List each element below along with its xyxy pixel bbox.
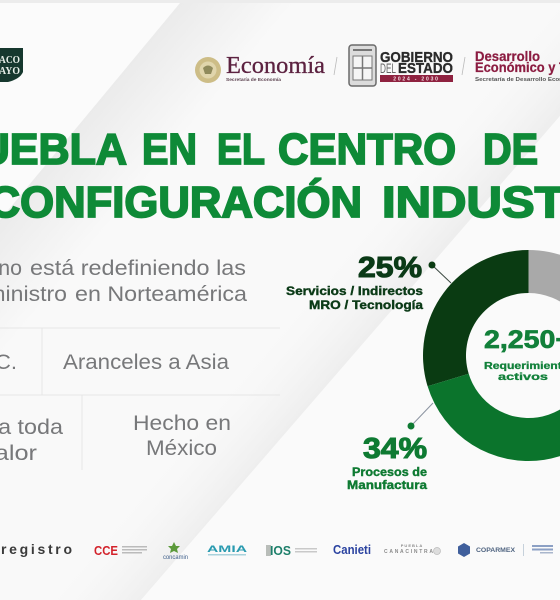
logo: Gobierno del Estado: ESTADO bbox=[398, 60, 453, 77]
logo: Desarrollo Económico y Trabajo: Desarrollo bbox=[475, 48, 540, 64]
logo: Gobierno del Estado: GOBIERNO bbox=[380, 49, 453, 66]
logo: Concamin bbox=[163, 542, 188, 561]
logo: Gobierno del Estado: 2024 - 2030 bbox=[393, 76, 440, 82]
title bbox=[0, 125, 560, 227]
callout: 34%: Manufactura bbox=[347, 478, 427, 492]
cell: Aranceles a Asia: Aranceles a Asia bbox=[63, 351, 229, 374]
title line 1: CENTRO bbox=[278, 125, 456, 174]
title line 1: DE bbox=[483, 125, 538, 174]
center value: 2,250+ bbox=[484, 326, 560, 354]
center value bbox=[484, 326, 560, 383]
title line 1: EN bbox=[142, 125, 197, 174]
logo: Gobierno del Estado bbox=[349, 45, 453, 86]
cell: Hecho en México bbox=[133, 412, 231, 460]
logo: Cinco de Mayo shield bbox=[0, 48, 23, 82]
logo: CCE: CCE bbox=[94, 543, 118, 558]
intro text: está redefiniendo las bbox=[30, 257, 246, 280]
logo: IOS: IOS bbox=[270, 543, 291, 558]
segment: dark green 25% bbox=[423, 250, 528, 386]
center value: Requerimientos bbox=[484, 361, 560, 372]
table of factors bbox=[0, 328, 280, 470]
logo: Canacintra bbox=[384, 543, 440, 555]
logo: Canacintra: PUEBLA bbox=[401, 543, 423, 548]
callout: 25%: MRO / Tecnología bbox=[309, 298, 423, 312]
cell: cadena de valor bbox=[0, 416, 63, 465]
logo: Canieti: Canieti bbox=[333, 542, 371, 557]
title line 2 bbox=[0, 177, 560, 227]
callout: 25%: Servicios / Indirectos bbox=[286, 284, 423, 298]
donut chart bbox=[423, 250, 560, 461]
callout: 34%: Procesos de bbox=[352, 465, 427, 479]
divider slash bbox=[462, 57, 465, 75]
callout: 34% bbox=[347, 403, 433, 492]
cell: Hecho en México: Hecho en bbox=[133, 412, 231, 435]
intro text bbox=[0, 257, 247, 306]
logo: Economía bbox=[195, 53, 325, 83]
divider slash bbox=[334, 57, 337, 75]
logo: Economía: Secretaría de Economía bbox=[226, 77, 282, 82]
cell: Hecho en México: México bbox=[146, 437, 217, 460]
registro label: registro bbox=[1, 541, 72, 557]
intro text: en Norteamérica bbox=[75, 283, 247, 306]
callout: 25%: 25% bbox=[358, 252, 422, 284]
footer sponsors bbox=[1, 541, 553, 561]
segment: green 34% bbox=[428, 356, 560, 461]
logo: Desarrollo Económico y Trabajo bbox=[475, 48, 560, 83]
center value: activos bbox=[498, 372, 549, 383]
logo: Concamin: concamin bbox=[163, 555, 188, 561]
logo: Coparmex bbox=[458, 543, 553, 557]
logo: Economía: Economía bbox=[226, 53, 325, 79]
callout: 25% bbox=[286, 252, 451, 312]
segment: gray bbox=[528, 250, 560, 356]
header logos bbox=[0, 45, 560, 86]
logo: Gobierno del Estado: DEL bbox=[380, 60, 396, 76]
logo: Coparmex: COPARMEX bbox=[476, 547, 516, 554]
title line 1 bbox=[0, 125, 560, 174]
logo: IOS bbox=[266, 543, 317, 558]
title line 1: EL bbox=[217, 125, 265, 174]
logo: AMIA: AMIA bbox=[207, 544, 248, 554]
callout: 34%: 34% bbox=[363, 433, 427, 465]
logo: CCE bbox=[94, 543, 147, 558]
logo: Canacintra: CANACINTRA bbox=[384, 549, 433, 555]
logo: AMIA bbox=[207, 544, 248, 556]
